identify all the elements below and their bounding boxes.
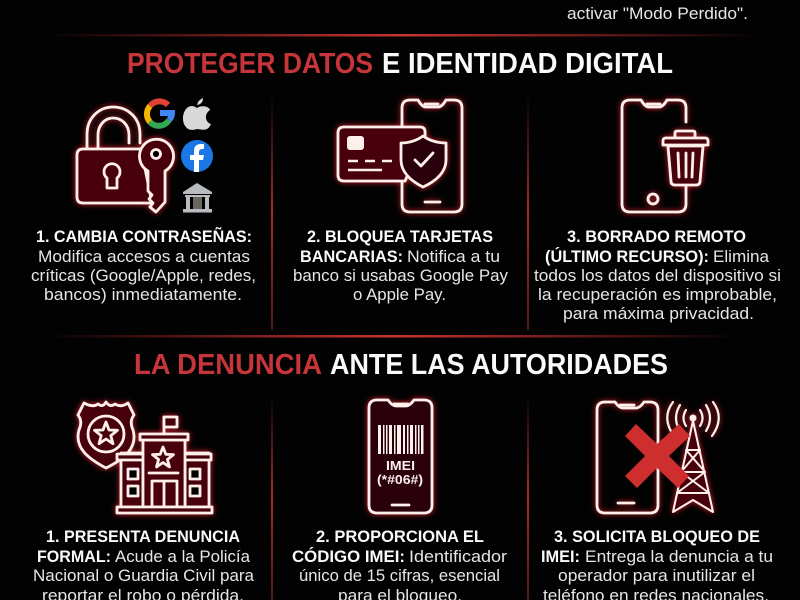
text: step 3 bbox=[534, 227, 781, 323]
text: step 2: Notifica a tu bbox=[407, 247, 500, 266]
text: step 2: único de 15 cifras, esencial bbox=[299, 566, 500, 585]
text: step 1: 1. PRESENTA DENUNCIA bbox=[46, 527, 240, 546]
text: imei label: IMEI bbox=[386, 458, 415, 473]
text: step 3: 3. BORRADO REMOTO bbox=[567, 227, 746, 246]
panel: bloquea tarjetas bbox=[293, 100, 508, 304]
heading: proteger datos bbox=[127, 48, 673, 80]
text: step 2: BANCARIAS: bbox=[300, 247, 403, 266]
text: step 3 bbox=[541, 527, 773, 600]
text: step 1: bancos) inmediatamente. bbox=[44, 285, 242, 304]
icon: phone, card and shield bbox=[338, 100, 462, 212]
text: step 1: Acude a la Policía bbox=[115, 547, 251, 566]
heading: proteger datos: E IDENTIDAD DIGITAL bbox=[382, 48, 673, 80]
icon: apple logo bbox=[183, 98, 211, 130]
icon: red cross bbox=[625, 424, 690, 488]
text: step 1: Nacional o Guardia Civil para bbox=[33, 566, 255, 585]
text: step 1: críticas (Google/Apple, redes, bbox=[31, 266, 256, 285]
icon: phone with imei barcode bbox=[369, 400, 432, 513]
icon: phone with trash can bbox=[622, 100, 708, 212]
heading: la denuncia: ANTE LAS AUTORIDADES bbox=[330, 349, 668, 381]
text: step 3: operador para inutilizar el bbox=[558, 566, 755, 585]
heading: la denuncia: LA DENUNCIA bbox=[134, 349, 322, 381]
text: step 2: 2. BLOQUEA TARJETAS bbox=[307, 227, 493, 246]
text: step 3: todos los datos del dispositivo si bbox=[534, 266, 781, 285]
panel: cambia contraseñas bbox=[31, 98, 256, 304]
text: step 3: Entrega la denuncia a tu bbox=[585, 547, 773, 566]
text: step 2: banco si usabas Google Pay bbox=[293, 266, 508, 285]
text: step 1: Modifica accesos a cuentas bbox=[38, 247, 250, 266]
text: imei label bbox=[377, 458, 423, 487]
text: step 3: 3. SOLICITA BLOQUEO DE bbox=[554, 527, 760, 546]
panel: presenta denuncia bbox=[33, 402, 255, 600]
text: imei label: (*#06#) bbox=[377, 472, 423, 487]
text: step 2: 2. PROPORCIONA EL bbox=[316, 527, 484, 546]
text: step 3: la recuperación es improbable, bbox=[538, 285, 777, 304]
panel: solicita bloqueo bbox=[541, 402, 773, 600]
text: step 2 bbox=[293, 227, 508, 304]
icon: facebook logo bbox=[181, 140, 213, 172]
icon: google logo bbox=[147, 101, 172, 126]
panel: borrado remoto bbox=[534, 100, 781, 323]
heading: proteger datos: PROTEGER DATOS bbox=[127, 48, 373, 80]
text: step 1: FORMAL: bbox=[37, 547, 111, 566]
text: step 2: Identificador bbox=[409, 547, 507, 566]
text: step 3: Elimina bbox=[713, 247, 770, 266]
text: step 2: CÓDIGO IMEI: bbox=[292, 547, 405, 566]
text: step 2: o Apple Pay. bbox=[353, 285, 446, 304]
panel: proporciona imei bbox=[292, 400, 507, 600]
text: step 1 bbox=[31, 226, 256, 304]
icon: bank building bbox=[183, 183, 212, 212]
icon: phone and tower bbox=[597, 402, 719, 513]
text: end of previous section: activar "Modo Perdido". bbox=[567, 4, 748, 23]
heading: la denuncia bbox=[134, 349, 668, 381]
barcode bbox=[378, 425, 424, 454]
icon: padlock and key bbox=[77, 107, 174, 212]
text: step 3: para máxima privacidad. bbox=[563, 304, 754, 323]
icon: police badge and station bbox=[78, 402, 212, 513]
text: step 3: IMEI: bbox=[541, 547, 580, 566]
text: step 1 bbox=[33, 527, 255, 600]
text: step 3: (ÚLTIMO RECURSO): bbox=[545, 247, 709, 266]
text: step 2 bbox=[292, 527, 507, 600]
text: step 1: 1. CAMBIA CONTRASEÑAS: bbox=[36, 226, 252, 246]
